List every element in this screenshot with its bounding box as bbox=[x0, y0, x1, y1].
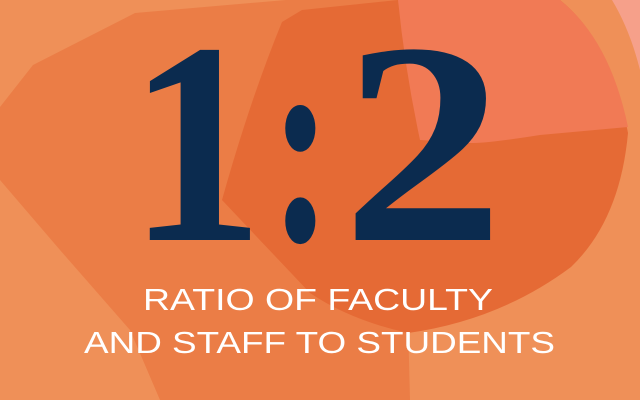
shape: salmon top-right bbox=[398, 0, 628, 143]
subtitle: RATIO OF FACULTY bbox=[143, 282, 493, 317]
subtitle bbox=[84, 282, 555, 360]
shape: mid orange polygon left bbox=[0, 0, 410, 400]
subtitle: AND STAFF TO STUDENTS bbox=[84, 325, 555, 360]
big ratio number bbox=[128, 0, 504, 303]
shape: dark orange blob bbox=[222, 0, 628, 333]
shape: pale pink corner bbox=[612, 0, 640, 70]
